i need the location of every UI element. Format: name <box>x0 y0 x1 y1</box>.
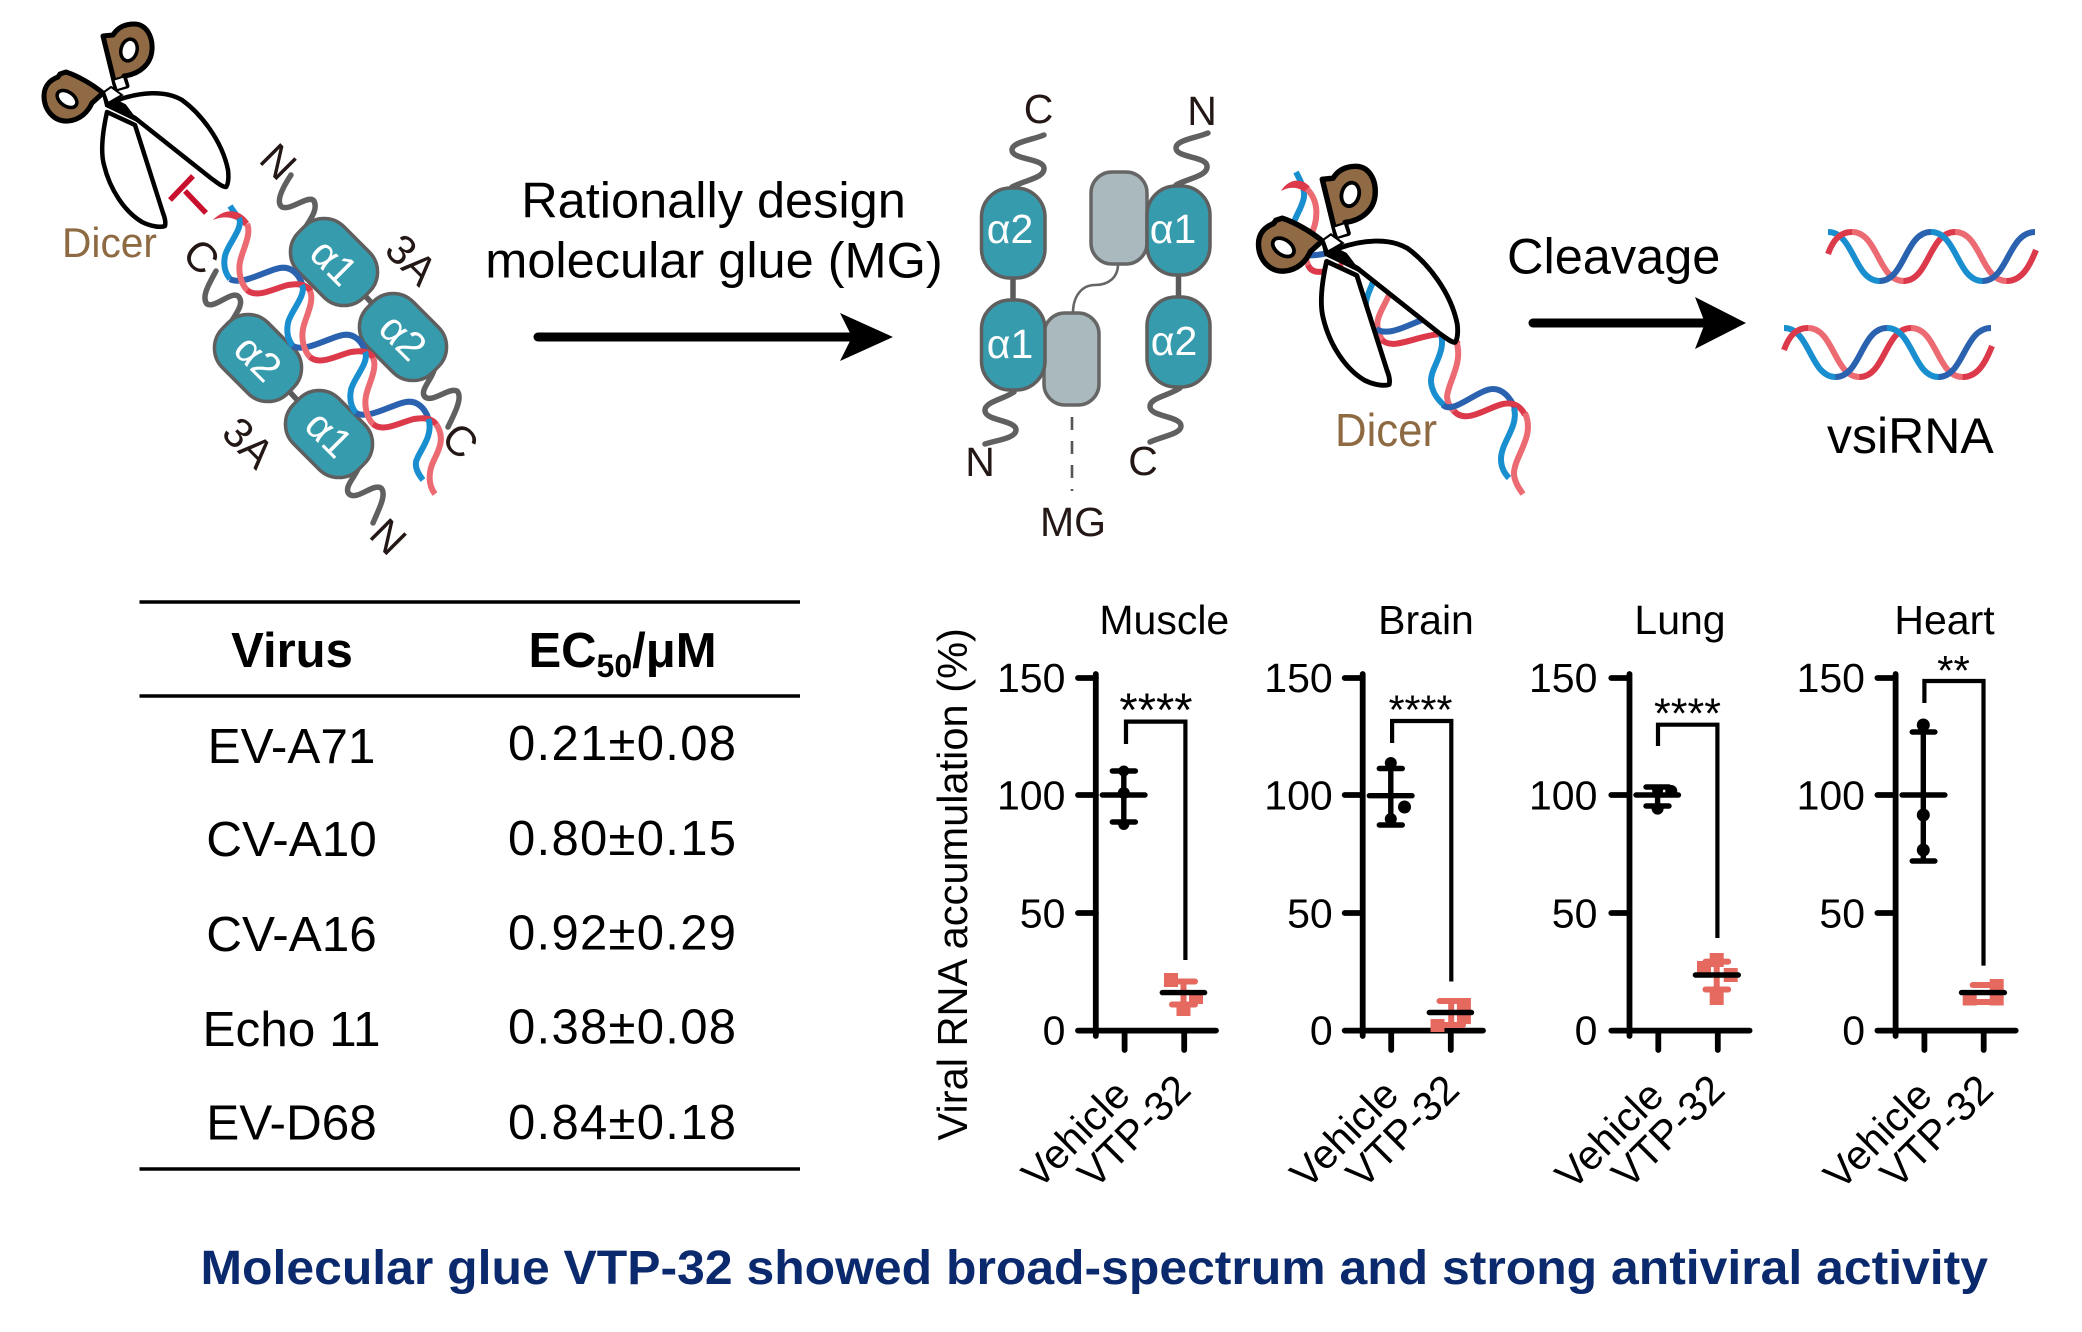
label: C left: C <box>174 229 229 284</box>
domain alpha2 left <box>203 303 313 413</box>
tick labels: 150 <box>1797 655 1865 701</box>
icon: vsiRNA helix lower <box>1784 328 1992 377</box>
tick labels <box>1264 655 1333 1054</box>
table header: EC50: 50 <box>597 648 632 684</box>
connectors <box>1013 274 1178 301</box>
tick labels <box>1529 655 1597 1054</box>
table: EC50 values <box>140 602 800 1169</box>
domain alpha1 lower <box>274 379 384 489</box>
domain alpha2 left top <box>982 188 1045 278</box>
x labels <box>1815 1066 2002 1198</box>
chart title: Muscle <box>1099 597 1229 643</box>
vehicle data points <box>1369 757 1412 825</box>
domain alpha2 right bottom <box>1147 297 1210 387</box>
VTP-32 data points <box>1429 998 1472 1032</box>
panel: 3A dimer bound to RNA with Dicer blocked <box>44 24 488 564</box>
label: 3A upper: 3A <box>377 225 446 294</box>
domain alpha2 left: α2 <box>225 325 291 391</box>
label: C right: C <box>433 413 488 468</box>
vehicle data points <box>1102 766 1145 830</box>
RNA duplex ribbon <box>213 206 441 494</box>
icon: Dicer scissors <box>1259 166 1458 385</box>
vehicle data points <box>1902 718 1945 861</box>
table header: EC50: EC <box>528 624 597 678</box>
tick labels: 0 <box>1575 1008 1597 1054</box>
panel: molecular glue bound 3A dimer <box>965 86 1217 545</box>
domain alpha2 right bottom: α2 <box>1151 318 1197 364</box>
row: CV-A16 <box>206 906 736 962</box>
label: C bottom: C <box>1128 438 1158 484</box>
axes <box>1078 674 1216 1050</box>
arrow: design step <box>538 313 893 361</box>
label: C top: C <box>1024 86 1053 132</box>
significance bracket <box>1924 681 1984 966</box>
x labels <box>1281 1066 1468 1197</box>
tick labels: 150 <box>1529 655 1597 701</box>
wavy termini <box>205 175 459 523</box>
chart title: Brain <box>1378 597 1474 643</box>
tick labels: 100 <box>1797 772 1865 818</box>
row: CV-A10: 0.80±0.15 <box>508 812 736 866</box>
row: Echo 11: 0.38±0.08 <box>508 1000 736 1054</box>
RNA duplex ribbon <box>1281 172 1528 494</box>
tick labels: 100 <box>1264 772 1333 818</box>
row: EV-A71 <box>208 717 736 774</box>
label: N lower: N <box>361 509 416 564</box>
arrow: cleavage step <box>1533 297 1746 349</box>
chart: Lung <box>1529 597 1750 1198</box>
label: N top: N <box>1187 88 1217 134</box>
panel: Dicer cleaving RNA <box>1259 166 1528 494</box>
tick labels: 0 <box>1842 1008 1865 1054</box>
tick labels: 0 <box>1043 1008 1065 1054</box>
domain alpha1 upper <box>279 207 389 317</box>
icon: Dicer scissors <box>44 24 228 227</box>
domain alpha1 left bottom: α1 <box>987 321 1033 367</box>
x labels: Vehicle <box>1815 1072 1941 1198</box>
3A linkers <box>258 262 403 434</box>
molecular glue upper block <box>1091 172 1147 264</box>
icon: vsiRNA helix upper <box>1828 232 2036 281</box>
VTP-32 data points <box>1162 973 1205 1016</box>
row: EV-D68: 0.84±0.18 <box>508 1096 736 1150</box>
domain alpha1 upper: α1 <box>301 229 367 295</box>
chart title: Heart <box>1894 597 1995 643</box>
label: N bottom: N <box>965 439 995 485</box>
domain alpha2 left top: α2 <box>987 206 1033 252</box>
domain alpha1 right top <box>1147 186 1210 275</box>
label: MG: MG <box>1040 499 1106 545</box>
x labels: VTP-32 <box>1337 1066 1468 1197</box>
vehicle data points <box>1636 784 1678 815</box>
x labels: VTP-32 <box>1871 1066 2002 1197</box>
row: CV-A10: CV-A10 <box>206 812 377 867</box>
significance stars: **** <box>1654 690 1721 738</box>
row: EV-D68 <box>206 1096 736 1150</box>
conclusion banner: Molecular glue VTP-32 showed broad-spectrum and strong antiviral activity <box>200 1242 1988 1295</box>
significance stars: ** <box>1937 647 1970 694</box>
icon: inhibition mark <box>170 176 206 213</box>
row: EV-A71: EV-A71 <box>208 719 375 774</box>
axes <box>1345 674 1483 1050</box>
significance bracket <box>1658 725 1717 938</box>
tick labels: 50 <box>1287 890 1333 936</box>
row: Echo 11: Echo 11 <box>203 1002 380 1057</box>
row: CV-A16: 0.92±0.29 <box>508 906 736 960</box>
row: EV-D68: EV-D68 <box>206 1096 377 1150</box>
tick labels: 100 <box>1529 772 1597 818</box>
tick labels: 50 <box>1819 890 1865 936</box>
molecular glue lower block <box>1044 313 1099 405</box>
label: N upper: N <box>251 134 306 189</box>
tick labels: 50 <box>1552 890 1597 936</box>
tick labels: 50 <box>1020 890 1065 936</box>
significance bracket <box>1392 721 1451 982</box>
VTP-32 data points <box>1962 979 2004 1006</box>
axes <box>1611 674 1750 1050</box>
x labels <box>1546 1066 1733 1198</box>
significance stars: **** <box>1119 683 1193 736</box>
chart: Muscle <box>997 597 1229 1197</box>
row: EV-A71: 0.21±0.08 <box>508 717 736 771</box>
chart: Heart <box>1797 597 2016 1198</box>
table header: EC50: /μM <box>632 624 717 678</box>
tick labels: 150 <box>1264 655 1333 701</box>
domain alpha1 right top: α1 <box>1150 206 1196 252</box>
table header: Virus: Virus <box>231 624 353 678</box>
label: Dicer: Dicer <box>62 219 157 266</box>
VTP-32 data points <box>1695 953 1738 1005</box>
chart title: Lung <box>1634 597 1726 643</box>
significance bracket <box>1126 722 1185 960</box>
axes <box>1877 674 2016 1050</box>
label: Cleavage: Cleavage <box>1507 228 1720 284</box>
domain alpha1 lower: α1 <box>296 401 362 467</box>
tick labels: 100 <box>997 772 1065 818</box>
wavy termini <box>985 133 1208 444</box>
label: Dicer: Dicer <box>1335 404 1437 456</box>
domain alpha2 right: α2 <box>370 304 436 370</box>
chart: Brain <box>1264 597 1483 1197</box>
x labels: Vehicle <box>1546 1072 1672 1198</box>
x labels <box>1013 1066 1199 1197</box>
x labels: Vehicle <box>1013 1071 1139 1197</box>
x labels: Vehicle <box>1281 1071 1407 1197</box>
tick labels: 150 <box>997 655 1065 701</box>
text: rationally design molecular glue: molecular glue (MG) <box>485 232 943 288</box>
row: Echo 11 <box>203 1000 736 1057</box>
tick labels <box>997 655 1065 1054</box>
domain alpha1 left bottom <box>982 300 1045 390</box>
y-axis title: Viral RNA accumulation (%) <box>929 628 976 1140</box>
row: CV-A10 <box>206 812 736 867</box>
label: vsiRNA: vsiRNA <box>1827 408 1994 464</box>
x labels: VTP-32 <box>1603 1066 1733 1197</box>
tick labels <box>1797 655 1865 1054</box>
row: CV-A16: CV-A16 <box>206 907 377 962</box>
domain alpha2 right <box>348 282 458 392</box>
label: 3A lower: 3A <box>214 408 283 477</box>
text: rationally design molecular glue: Rationally design <box>521 172 906 228</box>
x labels: VTP-32 <box>1069 1066 1199 1197</box>
significance stars: **** <box>1389 686 1452 732</box>
tick labels: 0 <box>1310 1008 1333 1054</box>
dashed pointer <box>1071 417 1073 491</box>
molecular glue linker <box>1073 264 1118 313</box>
